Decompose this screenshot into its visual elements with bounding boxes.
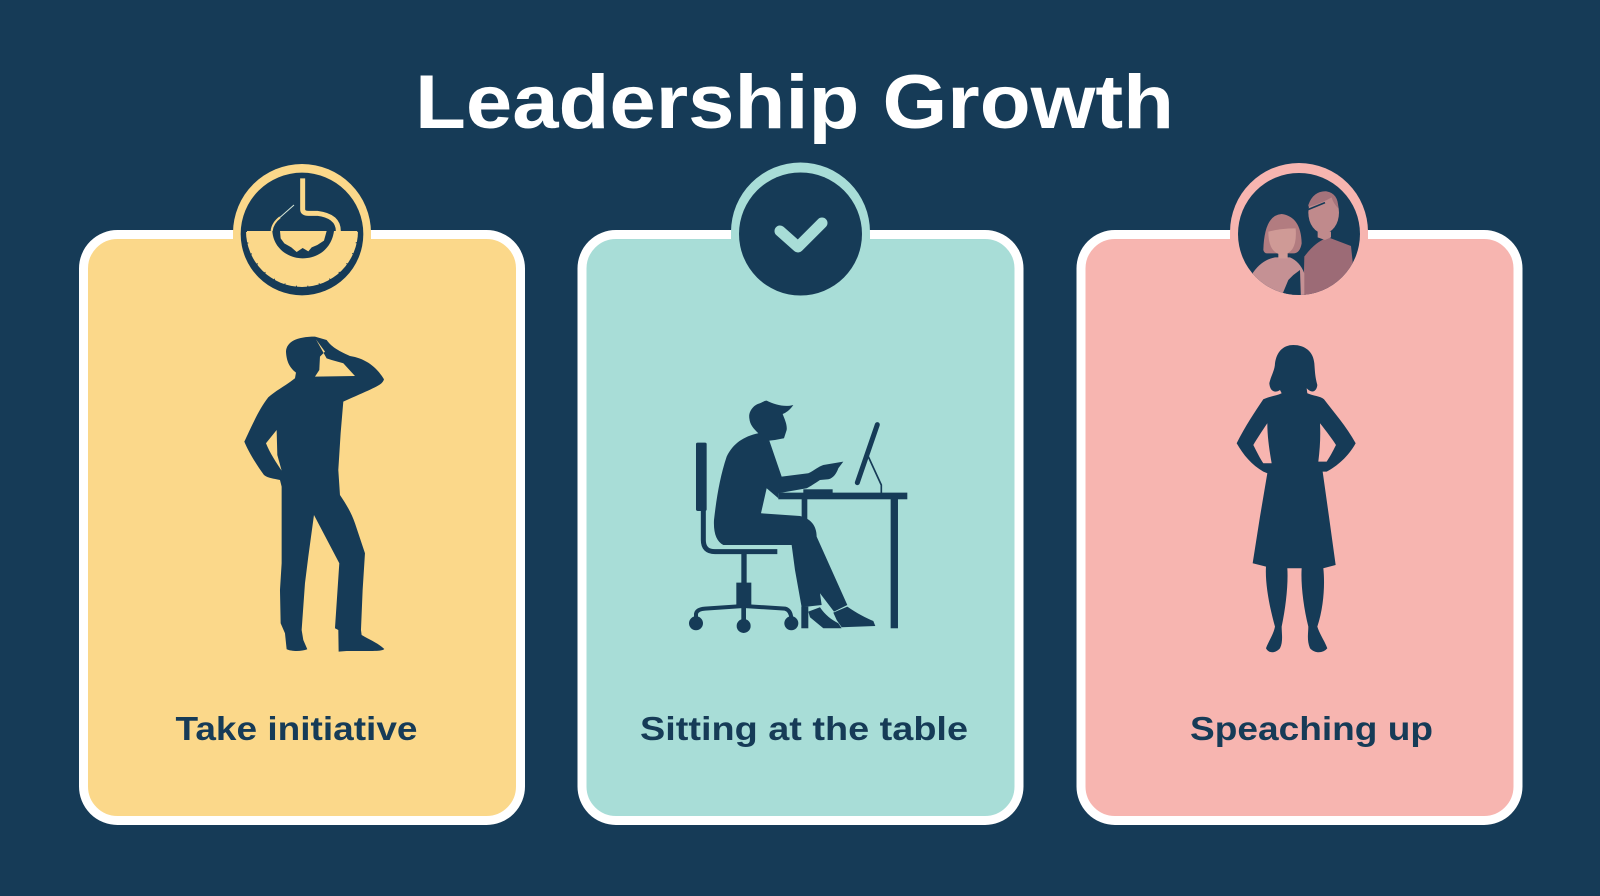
chair [689,443,798,633]
icon: check badge [731,162,870,296]
card background [84,234,520,820]
panel: speaching up [1081,163,1518,820]
man in portrait [1304,191,1353,295]
card background [582,234,1019,820]
monitor [857,425,881,493]
woman in portrait [1251,214,1304,300]
desk [778,489,907,628]
label: Sitting at the table [640,710,968,747]
icon: tool badge [233,164,371,295]
infographic canvas [79,73,1522,825]
label: Speaching up [1190,710,1433,747]
panel: sitting at the table [582,162,1019,820]
person [714,401,847,612]
figure: woman hands on hips [1237,345,1356,652]
label: Take initiative [176,710,418,747]
icon: two people badge [1230,163,1368,300]
title: Leadership Growth [415,60,1174,145]
figure: man hand on head [244,337,384,652]
card background [1081,234,1518,820]
shoes [801,607,875,628]
figure: person seated at desk [689,401,907,633]
panel: take initiative [84,164,520,821]
